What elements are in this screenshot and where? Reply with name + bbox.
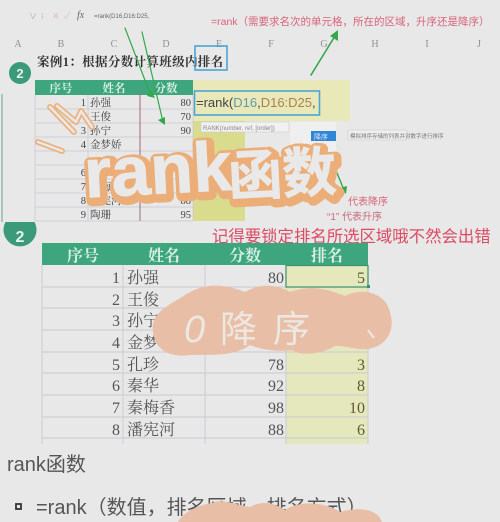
bottom table: 潘宪河 (127, 421, 175, 439)
sort dropdown (290, 122, 444, 158)
column letters: D (162, 39, 170, 50)
badge 2 bottom (3, 222, 37, 246)
column letters: H (371, 39, 379, 50)
left edge line (1, 94, 3, 222)
red note: order meaning (327, 195, 388, 223)
top table: 姓名 (102, 81, 126, 95)
bottom table: 分数 (229, 246, 261, 265)
sticker: burst marks (38, 106, 92, 151)
top table: 70 (180, 112, 191, 123)
bottom table: 88 (268, 422, 284, 439)
top table: 王俊 (90, 110, 111, 123)
top table: 孙宁 (90, 124, 111, 137)
column letters: C (111, 39, 118, 50)
bottom table: 10 (349, 400, 365, 417)
top table: 80 (180, 98, 191, 109)
badge 2 top: 2 (16, 66, 24, 81)
section title: rank function: rank函数 (7, 453, 86, 476)
bottom table: 98 (268, 400, 284, 417)
bottom table: 孙宁 (127, 312, 159, 330)
top table: 潘宪河 (90, 194, 122, 207)
top table (35, 80, 350, 221)
bottom table: 6 (112, 378, 120, 395)
column letters (14, 39, 481, 50)
formula bar: ✓ (64, 11, 71, 21)
red note: lock range: 记得要锁定排名所选区域哦不然会出错 (212, 228, 491, 246)
column letters: I (425, 39, 429, 50)
sticker title: rank函数: rank (84, 130, 236, 215)
bullet syntax line: =rank（数值，排名区域，排名方式） (36, 496, 367, 519)
top table: 88 (180, 196, 191, 207)
top table: 9 (81, 210, 86, 221)
sort dropdown: 模拟排序存储的列表并对数字进行排序 (350, 132, 444, 140)
top table: 7 (81, 182, 86, 193)
formula tooltip (201, 122, 289, 132)
top table: 90 (180, 126, 191, 137)
bottom table: 秦华 (127, 377, 159, 395)
sticker: 0 descending blob: 降序 (220, 309, 326, 350)
red note: order meaning: 代表降序 (348, 195, 388, 208)
sticker: 0 descending blob: 0 (184, 309, 205, 351)
bottom table: 3 (112, 313, 120, 330)
bottom table: 6 (357, 422, 365, 439)
top table: 序号 (50, 81, 73, 95)
top table: 陶珊 (90, 208, 111, 221)
formula bar: ⁝ (41, 12, 44, 21)
bottom table: 孔珍 (127, 356, 159, 374)
sticker title: rank函数: 函数 (227, 142, 338, 208)
bottom table: 排名 (311, 246, 343, 265)
formula input box (194, 91, 320, 115)
bottom table: 王俊 (127, 291, 159, 309)
bottom table (0, 243, 500, 454)
formula bar: =rank(D16,D16:D25, (94, 14, 150, 20)
bottom table: 80 (268, 270, 284, 287)
bottom table: 金梦 (127, 333, 159, 352)
bottom table: 7 (112, 400, 120, 417)
bottom table: 4 (112, 335, 120, 352)
bottom table: 序号 (67, 247, 99, 265)
formula bar: fx (77, 10, 85, 21)
badge 2 bottom: 2 (16, 229, 25, 246)
column letters: A (14, 39, 22, 50)
bottom table: 92 (268, 378, 284, 395)
top table: 95 (180, 210, 191, 221)
sticker: 0 descending blob (153, 286, 392, 356)
bottom table: 3 (357, 357, 365, 374)
bottom table: 1 (112, 270, 120, 287)
column letters: J (477, 39, 481, 50)
highlight box (195, 46, 227, 70)
arrows green (125, 28, 347, 194)
bottom table: 1 (357, 335, 365, 352)
bottom table: 2 (112, 292, 120, 309)
column letters: E (216, 39, 222, 50)
column letters: G (320, 39, 328, 50)
top table: 金梦娇 (90, 138, 122, 151)
column letters: F (268, 39, 274, 50)
top table: 8 (81, 196, 86, 207)
sort dropdown: 降序 (314, 132, 328, 141)
bottom table: 78 (268, 357, 284, 374)
bottom table: 5 (112, 357, 120, 374)
red note: order meaning: “1” 代表升序 (327, 210, 382, 223)
formula bar (29, 10, 150, 21)
badge 2 top (9, 62, 31, 84)
column letters: B (58, 39, 65, 50)
top table: 孙强 (90, 96, 111, 109)
bottom table: 5 (357, 270, 365, 287)
sticker: bottom blob (178, 501, 382, 522)
bottom table: 8 (112, 422, 120, 439)
top table: 分数 (154, 81, 178, 95)
heading: case 1: 案例1：根据分数计算班级内排名 (37, 54, 224, 69)
sticker title: rank函数 (82, 121, 340, 219)
top table: 3 (81, 126, 86, 137)
bottom table: 姓名 (148, 246, 180, 265)
bottom table: 孙强 (127, 269, 160, 287)
formula bar: ∨ (29, 12, 37, 21)
top table: 秦梅香 (90, 180, 122, 193)
formula bar: ✕ (52, 11, 60, 21)
top table: 6 (81, 168, 86, 179)
formula tooltip: RANK(number, ref, [order]) (203, 126, 275, 132)
sticker title: rank函数: 函数 (229, 145, 340, 211)
top table: 1 (81, 98, 86, 109)
bottom table: 秦梅香 (127, 399, 175, 417)
red note: rank syntax: =rank（需要求名次的单元格，所在的区域，升序还是降序） (211, 15, 490, 28)
top table: 4 (81, 140, 87, 151)
sticker title: rank函数: rank (82, 127, 234, 213)
formula input box: =rank(D16,D16:D25, (196, 95, 316, 110)
bottom table: 8 (357, 378, 365, 395)
